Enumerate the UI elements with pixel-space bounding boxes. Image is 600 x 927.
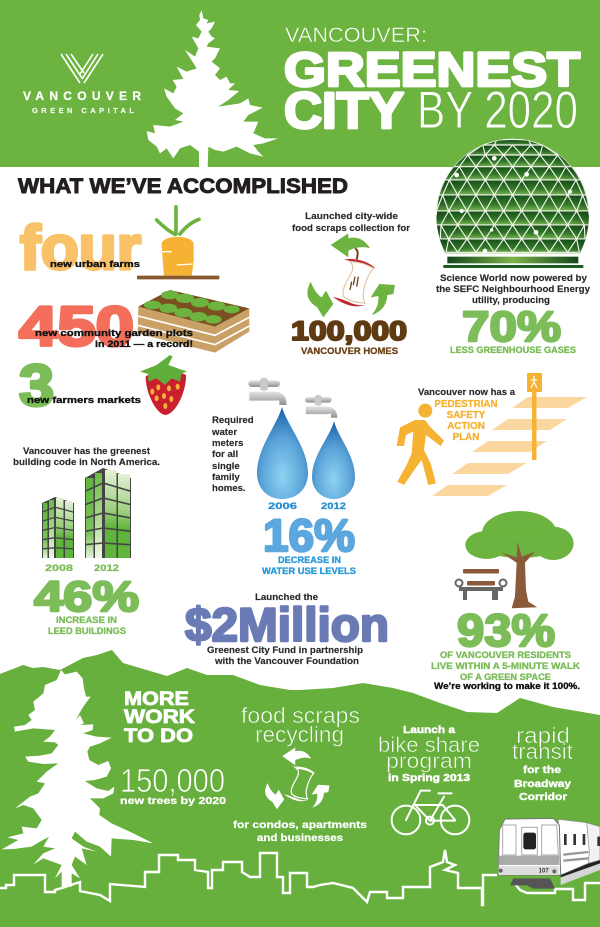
description text: water [211, 427, 237, 438]
panel: food scraps collection [291, 211, 410, 357]
label line 2: in 2011 — a record! [95, 339, 193, 350]
heading: bike share: bike share [378, 734, 480, 757]
description line 1: Greenest City Fund in partnership [207, 645, 363, 656]
plan name: PLAN [453, 432, 479, 443]
icon: bottom tree silhouette [2, 670, 153, 887]
icon: V mark [61, 54, 103, 83]
panel: bike share [378, 724, 480, 834]
description text [211, 415, 254, 494]
panel: green space access [431, 511, 580, 692]
panel: pedestrian safety [397, 373, 587, 496]
icon: large building [85, 468, 131, 558]
icon: city skyline outline [0, 850, 600, 905]
panel: $2 million fund [185, 592, 389, 667]
description line 1: Vancouver has the greenest [23, 446, 151, 457]
label line 1: for the [523, 764, 561, 776]
year 2006: 2006 [268, 501, 297, 512]
panel: water meters [211, 378, 357, 577]
heading: transit: transit [512, 739, 573, 764]
icon: crossing sign [527, 373, 542, 460]
number: 70%: 70% [462, 303, 561, 351]
number: 150,000: 150,000 [120, 762, 225, 799]
label: LESS GREENHOUSE GASES [450, 345, 577, 356]
description line 2: building code in North America. [13, 457, 160, 468]
icon: large faucet [248, 378, 287, 405]
heading: what we've accomplished: WHAT WE’VE ACCOMPLISHED [18, 175, 348, 198]
title line: City: CITY [284, 82, 404, 139]
intro text line 2: food scraps collection for [292, 223, 410, 234]
label: VANCOUVER HOMES [301, 346, 399, 357]
panel: more work to do [120, 689, 226, 807]
label: new urban farms [50, 259, 140, 270]
label line 1: OF VANCOUVER RESIDENTS [440, 650, 572, 661]
description text: for all [212, 449, 238, 460]
label line 2: Broadway [514, 778, 571, 790]
description line 2: the SEFC Neighbourhood Energy [436, 284, 591, 295]
icon: small faucet [305, 395, 337, 418]
number: 3: 3 [19, 354, 54, 418]
icon: large water drop [257, 407, 308, 499]
plan name: PEDESTRIAN [434, 399, 498, 410]
icon: header tree silhouette [147, 10, 278, 167]
icon: SkyTrain: 107 [539, 869, 549, 875]
icon: SkyTrain [498, 818, 600, 889]
heading line 2: WORK [124, 707, 195, 728]
title line: Vancouver: VANCOUVER: [285, 24, 427, 47]
number: 100,000: 100,000 [291, 316, 407, 346]
icon: bench [456, 569, 506, 600]
year 2012: 2012 [94, 563, 119, 574]
heading: rapid: rapid [516, 723, 570, 748]
description text: single [212, 461, 240, 472]
label: new farmers markets [27, 395, 141, 406]
amount: $2Million [185, 598, 389, 651]
label line 2: LEED BUILDINGS [48, 626, 127, 637]
label line 1: INCREASE IN [56, 615, 117, 626]
icon: strawberry [140, 355, 187, 415]
icon: white recycling apple core [265, 748, 330, 809]
label: new trees by 2020 [120, 795, 226, 807]
year 2008: 2008 [45, 563, 74, 574]
number: 46%: 46% [34, 573, 139, 621]
panel: green building code [13, 446, 160, 637]
logo wordmark: VANCOUVER [23, 89, 141, 103]
label line 1: DECREASE IN [278, 555, 341, 566]
label line 3: Corridor [519, 791, 567, 803]
plan name [434, 399, 498, 443]
number: four: four [20, 214, 141, 283]
intro text: Launched city-wide [305, 211, 398, 222]
heading line 1: MORE [124, 689, 189, 710]
logo tagline: GREEN CAPITAL [32, 106, 134, 115]
panel: four urban farms [20, 207, 219, 283]
panel: 450 garden plots [19, 290, 249, 358]
header background [0, 0, 600, 167]
icon: recycling apple core [307, 233, 395, 317]
description line 2: with the Vancouver Foundation [214, 656, 359, 667]
logo: Vancouver Green Capital [23, 54, 141, 115]
heading: program: program [386, 750, 472, 773]
description text: homes. [212, 483, 246, 494]
label line 2: and businesses [257, 832, 343, 844]
icon: bicycle [392, 791, 469, 834]
description line 3: utility, producing [472, 295, 550, 306]
icon: tree [465, 511, 574, 608]
bottom green hills background [0, 650, 600, 927]
description line 1: Science World now powered by [440, 273, 588, 284]
icon: carrot [137, 207, 219, 279]
label line 3: OF A GREEN SPACE [460, 672, 552, 683]
number: 16%: 16% [263, 510, 355, 561]
intro text: Launched the [255, 592, 318, 603]
title line: Greenest: GREENEST [284, 44, 580, 97]
label line 1: for condos, apartments [233, 819, 367, 831]
number: 450: 450 [19, 294, 134, 358]
heading: launch a: Launch a [403, 724, 455, 736]
number: 93%: 93% [457, 605, 555, 656]
heading line 3: TO DO [124, 726, 193, 747]
label line 2: LIVE WITHIN A 5-MINUTE WALK [431, 661, 580, 672]
panel: Science World [435, 138, 592, 356]
icon: crosswalk stripes [432, 397, 587, 496]
description text: Required [212, 415, 254, 426]
note: We’re working to make it 100%. [434, 681, 580, 692]
icon: small building [42, 497, 74, 558]
description text: meters [212, 438, 243, 449]
panel: 3 farmers markets [19, 354, 187, 418]
label line 2: WATER USE LEVELS [262, 566, 357, 577]
heading line 1: food scraps [241, 703, 360, 728]
intro text: Vancouver now has a [418, 387, 516, 398]
title [284, 24, 580, 140]
icon: small water drop [312, 421, 355, 499]
description text: family [212, 472, 240, 483]
label: new community garden plots [35, 328, 193, 339]
panel: rapid transit [498, 723, 600, 889]
heading line 2: recycling [255, 722, 344, 747]
icon: garden crate [138, 290, 249, 353]
plan name: SAFETY [447, 410, 486, 421]
year 2012: 2012 [321, 501, 346, 512]
icon: walking person [397, 404, 444, 485]
panel: food scraps recycling [233, 703, 367, 844]
label: in Spring 2013 [388, 772, 470, 784]
plan name: ACTION [447, 421, 485, 432]
icon: geodesic dome [436, 138, 589, 268]
